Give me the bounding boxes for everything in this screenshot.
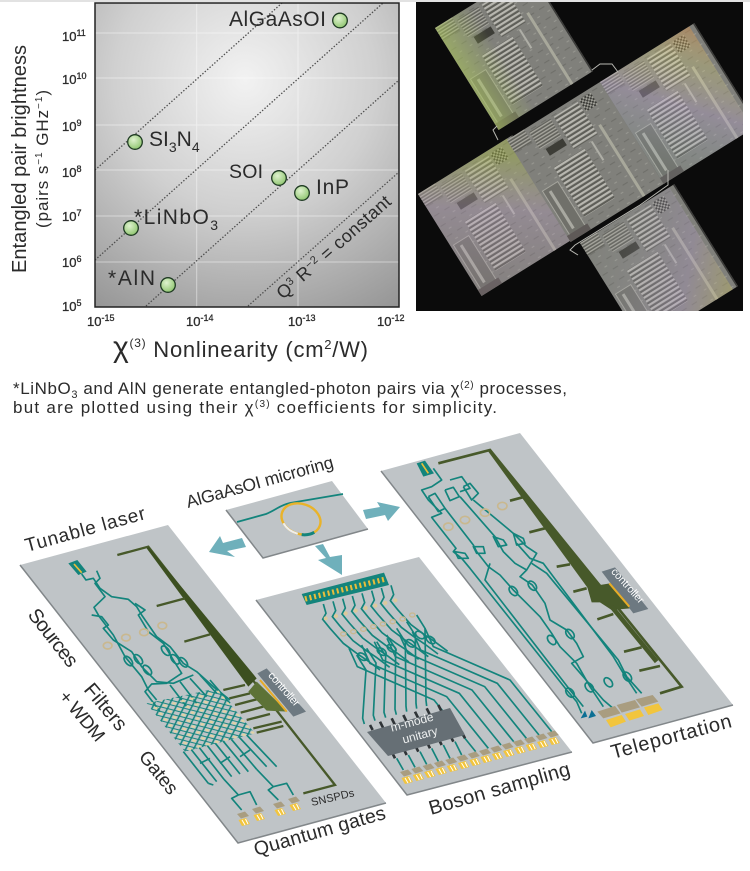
- data point: Si3N4: N: [177, 128, 192, 151]
- microring: [277, 498, 325, 540]
- y axis tick labels: 10: [62, 209, 76, 224]
- data point: InP: InP: [316, 176, 349, 199]
- bonding wires: [493, 64, 668, 255]
- x axis tick labels: [87, 313, 404, 329]
- footnote: 3: [71, 389, 77, 401]
- crossing waveguides: [349, 628, 552, 770]
- data point: SOI: SOI: [229, 161, 263, 183]
- waveguide network: [422, 468, 642, 713]
- label: AlGaAsOI microring: AlGaAsOI microring: [184, 452, 336, 512]
- constant figure of merit label: = constant: [312, 191, 395, 268]
- data point: LiNbO3: 3: [210, 217, 218, 233]
- ring resonators: [341, 613, 415, 636]
- data point: Si3N4: 3: [169, 139, 177, 155]
- constant figure of merit label: R: [288, 262, 315, 289]
- data point: SOI: [229, 161, 286, 185]
- y axis tick labels: 10: [62, 165, 76, 180]
- blue output couplers: [581, 710, 596, 718]
- controller: controller: [265, 670, 302, 709]
- data point: AlN: [108, 267, 175, 292]
- data point: LiNbO3: *LiNbO: [134, 206, 209, 229]
- chip centre: [507, 81, 665, 242]
- panel: AlGaAsOI microring: [226, 481, 368, 558]
- constant figure of merit label: 3: [284, 275, 296, 288]
- data point: Si3N4: [128, 128, 200, 155]
- label: Tunable laser: Tunable laser: [23, 503, 148, 557]
- y axis title: [9, 45, 52, 273]
- y axis title: (pairs s: [33, 166, 52, 228]
- y axis title: GHz: [33, 110, 52, 151]
- source: [68, 560, 87, 575]
- x axis tick labels: -12: [391, 313, 404, 323]
- controller: [602, 566, 648, 613]
- y axis tick labels: 10: [62, 119, 76, 134]
- label: Boson sampling: Boson sampling: [426, 758, 573, 820]
- source strip: [302, 573, 389, 605]
- control bus: [117, 547, 335, 793]
- m-mode unitary block: [367, 708, 465, 756]
- control bus: [438, 450, 682, 693]
- y axis tick labels: [62, 28, 86, 314]
- controller: [248, 668, 306, 717]
- footnote: but are plotted using their χ: [13, 398, 254, 417]
- m-mode unitary block: m-mode: [389, 710, 435, 735]
- footnote: (3): [255, 399, 270, 410]
- bus waveguide: [237, 494, 343, 522]
- x axis title: 2: [324, 337, 332, 352]
- x axis title: (3): [129, 336, 146, 350]
- y axis tick labels: 7: [76, 208, 81, 218]
- footnote: (2): [460, 380, 474, 391]
- photo: fabricated chips on black background: [416, 2, 743, 311]
- y axis tick labels: 10: [76, 71, 86, 81]
- y axis title: −1: [34, 96, 45, 109]
- arrow: to teleportation: [363, 502, 400, 521]
- constant figure of merit label: −2: [303, 254, 321, 271]
- footnote: [13, 379, 567, 417]
- chip bottom right: [580, 184, 738, 311]
- y axis tick labels: 10: [62, 299, 76, 314]
- footnote: coefficients for simplicity.: [271, 398, 497, 417]
- arrow: to boson sampling: [315, 544, 342, 575]
- x axis tick labels: -13: [302, 313, 315, 323]
- controller: controller: [608, 566, 647, 607]
- label: Filters: Filters: [79, 679, 131, 735]
- x axis title: /W): [332, 337, 368, 362]
- panel: teleportation circuit: [381, 433, 733, 743]
- x axis tick labels: 10: [377, 314, 391, 329]
- scatter chart: entangled pair brightness vs nonlinearity: [9, 3, 404, 364]
- data point: InP: [295, 176, 349, 200]
- chip right: [600, 23, 750, 184]
- y axis title: Entangled pair brightness: [9, 45, 31, 273]
- label: Sources: Sources: [23, 605, 82, 672]
- y axis title: −1: [34, 152, 45, 165]
- detector pads: [597, 695, 663, 727]
- chip base: [381, 433, 733, 743]
- y axis tick labels: 6: [76, 254, 81, 264]
- y axis tick labels: 8: [76, 164, 81, 174]
- label: + WDM: + WDM: [55, 686, 110, 746]
- rings: [444, 502, 507, 530]
- x axis tick labels: -15: [101, 313, 114, 323]
- footnote: and AlN generate entangled-photon pairs via χ: [78, 379, 460, 398]
- data point: Si3N4: 4: [192, 139, 200, 155]
- unitary pins: [370, 705, 465, 758]
- panel: boson sampling circuit: [256, 557, 572, 795]
- arrow: to quantum gates: [209, 536, 246, 557]
- detector row: [400, 730, 560, 784]
- x axis title: Nonlinearity (cm: [146, 337, 324, 362]
- source: [417, 461, 434, 477]
- y axis tick labels: 10: [62, 72, 76, 87]
- waveguide network: [82, 571, 293, 810]
- top edge band: [0, 0, 750, 2]
- chip base: [226, 481, 368, 558]
- y axis tick labels: 10: [62, 29, 76, 44]
- label: SNSPDs: SNSPDs: [310, 787, 356, 809]
- m-mode unitary block: unitary: [401, 724, 439, 747]
- y axis title: ): [33, 90, 52, 96]
- data point: Si3N4: SI: [149, 128, 169, 151]
- detectors: [237, 796, 301, 826]
- x axis title: χ: [113, 331, 129, 364]
- x axis tick labels: 10: [186, 314, 200, 329]
- panel: quantum gates circuit: [20, 525, 386, 843]
- data point: AlGaAsOI: AlGaAsOI: [229, 8, 326, 31]
- data point: AlN: *AlN: [108, 267, 155, 290]
- x axis tick labels: -14: [200, 313, 213, 323]
- chip base: [256, 557, 572, 795]
- rings: [103, 622, 167, 649]
- chip base: [20, 525, 386, 843]
- x axis tick labels: 10: [288, 314, 302, 329]
- y axis tick labels: 10: [62, 255, 76, 270]
- mesh and sources: [302, 573, 448, 724]
- y axis tick labels: 5: [76, 298, 81, 308]
- chip top left: [435, 0, 593, 130]
- y axis tick labels: 11: [76, 28, 86, 38]
- data point: LiNbO3: [124, 206, 218, 235]
- y axis tick labels: 9: [76, 118, 81, 128]
- label: Gates: Gates: [134, 747, 182, 799]
- label: Quantum gates: Quantum gates: [251, 802, 388, 861]
- footnote: *LiNbO: [13, 379, 71, 398]
- label: Teleportation: Teleportation: [609, 710, 734, 764]
- footnote: processes,: [474, 379, 567, 398]
- plot area: [95, 3, 399, 307]
- constant figure of merit label: Q: [272, 279, 296, 303]
- x axis tick labels: 10: [87, 314, 101, 329]
- chip left: [418, 135, 576, 296]
